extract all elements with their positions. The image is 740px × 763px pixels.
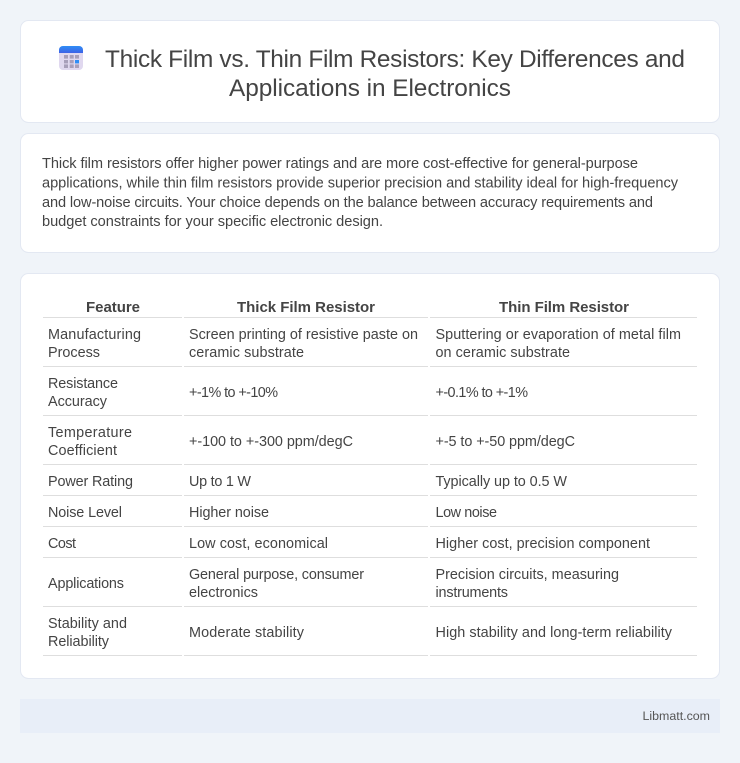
row: temperature coefficient: Temperature <box>48 425 132 441</box>
row: resistance accuracy <box>48 376 528 410</box>
row: stability and reliability: Stability and <box>48 616 127 632</box>
row: manufacturing process: on ceramic substrate <box>436 345 570 361</box>
icon: calendar <box>59 46 83 70</box>
table header <box>86 299 629 316</box>
row: noise level: Noise Level <box>48 505 122 521</box>
row: manufacturing process: ceramic substrate <box>189 345 304 361</box>
title: Applications in Electronics <box>229 75 511 102</box>
row: resistance accuracy: Resistance <box>48 376 118 392</box>
row: power rating: Up to 1 W <box>189 474 251 490</box>
row: temperature coefficient: Coefficient <box>48 443 117 459</box>
row: applications: General purpose, consumer <box>189 567 364 583</box>
row: noise level: Low noise <box>436 505 497 521</box>
footer: Libmatt.com <box>642 709 710 723</box>
table header: Thick Film Resistor <box>237 299 375 316</box>
row: cost: Low cost, economical <box>189 536 328 552</box>
row: stability and reliability: Reliability <box>48 634 110 650</box>
row: cost <box>48 536 650 552</box>
row: manufacturing process: Sputtering or evaporation of metal film <box>436 327 681 343</box>
row: cost: Higher cost, precision component <box>436 536 650 552</box>
row: stability and reliability: Moderate stability <box>189 625 305 641</box>
row: noise level: Higher noise <box>189 505 269 521</box>
row: temperature coefficient: +-100 to +-300 ppm/degC <box>189 434 353 450</box>
summary text: and low-noise circuits. Your choice depends on the balance between accuracy requirements and <box>42 195 653 211</box>
row: noise level <box>48 505 497 521</box>
row: resistance accuracy: +-1% to +-10% <box>189 385 278 401</box>
summary text: budget constraints for your specific electronic design. <box>42 214 383 230</box>
row: applications: Applications <box>48 576 124 592</box>
title: Thick Film vs. Thin Film Resistors: Key Differences and <box>105 46 685 73</box>
row: temperature coefficient: +-5 to +-50 ppm/degC <box>436 434 575 450</box>
summary text: Thick film resistors offer higher power ratings and are more cost-effective for general-purpose <box>42 156 638 172</box>
row: power rating: Typically up to 0.5 W <box>436 474 567 490</box>
table header: Feature <box>86 299 140 316</box>
panel: comparison table <box>20 274 720 678</box>
row: power rating: Power Rating <box>48 474 133 490</box>
row: power rating <box>48 474 567 490</box>
row: cost: Cost <box>48 536 76 552</box>
row: manufacturing process: Process <box>48 345 100 361</box>
row: resistance accuracy: Accuracy <box>48 394 108 410</box>
row: applications: Precision circuits, measuring <box>436 567 619 583</box>
row: manufacturing process <box>48 327 681 361</box>
row: stability and reliability: High stability and long-term reliability <box>436 625 673 641</box>
summary text <box>42 156 679 230</box>
table header: Thin Film Resistor <box>499 299 629 316</box>
row: manufacturing process: Manufacturing <box>48 327 141 343</box>
row: applications <box>48 567 619 601</box>
panel: title card <box>20 20 720 122</box>
row: temperature coefficient <box>48 425 575 459</box>
footer <box>20 699 720 733</box>
row: applications: instruments <box>436 585 508 601</box>
row: resistance accuracy: +-0.1% to +-1% <box>436 385 528 401</box>
row: stability and reliability <box>48 616 673 650</box>
title <box>105 46 685 102</box>
summary text: applications, while thin film resistors provide superior precision and stability ideal for high-frequency <box>42 176 679 192</box>
panel: summary card <box>20 134 720 252</box>
row: applications: electronics <box>189 585 258 601</box>
row: manufacturing process: Screen printing of resistive paste on <box>189 327 418 343</box>
